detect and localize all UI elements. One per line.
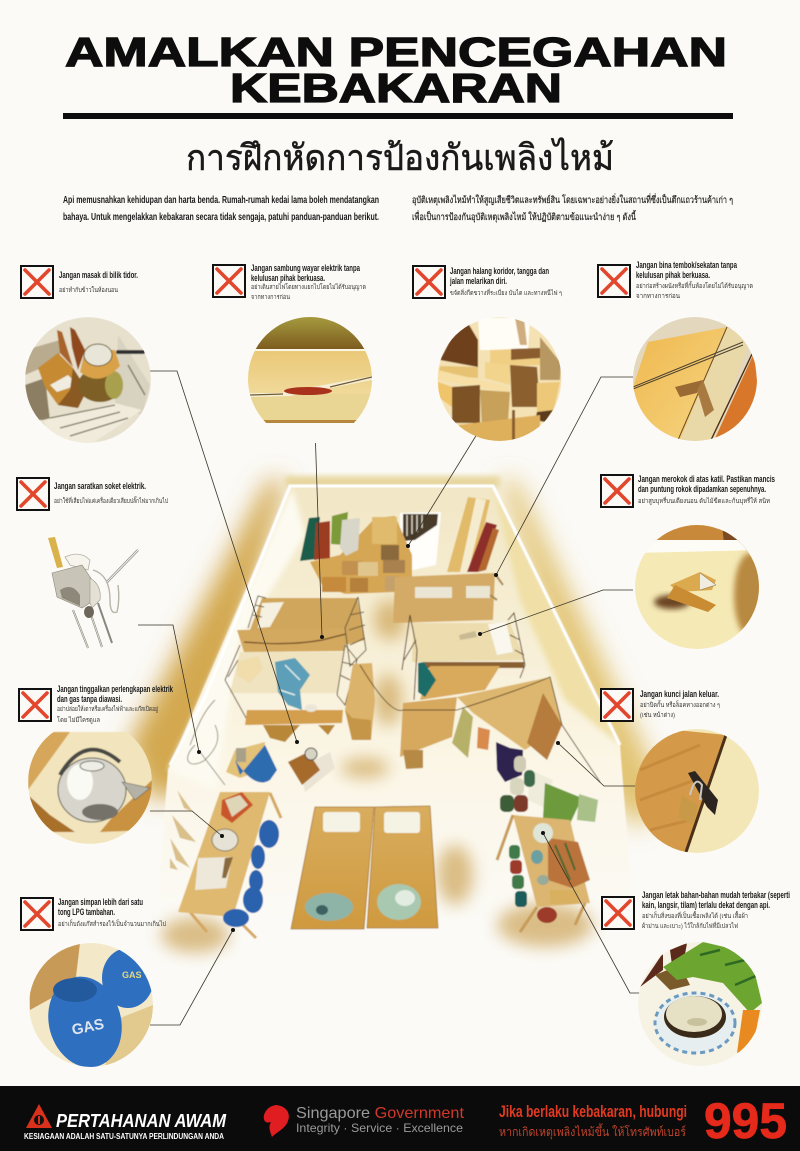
warning: gas cylinder: Jangan simpan lebih dari satu [58, 897, 143, 907]
circle: gas cylinders: GAS [70, 1016, 106, 1039]
boards against wall [447, 497, 499, 572]
circle: matchbox on bed [635, 525, 766, 650]
intro text: malay: bahaya. Untuk mengelakkan kebakaran secara tidak sengaja, patuhi panduan-panduan berikut. [63, 212, 379, 223]
x box: gas cylinder [21, 898, 53, 930]
warning: socket: อย่าใช้ที่เสียบไฟแค่เครื่องเดียวเสียบปลั๊กไฟมากเกินไป [54, 496, 168, 505]
title: KEBAKARAN [230, 65, 562, 111]
warning: smoking [638, 474, 775, 505]
warning: cooking: อย่าทำกับข้าวในห้องนอน [59, 286, 118, 294]
warning: locked exit [640, 689, 720, 719]
gas cylinders [223, 820, 279, 927]
warning: gas cylinder [58, 897, 166, 928]
circle: cloth near stove [638, 942, 762, 1066]
dried leaves [170, 790, 196, 870]
warning: socket [54, 481, 168, 505]
laundry [477, 727, 598, 828]
civil defence logo [24, 1104, 227, 1141]
warning: corridor: jalan melarikan diri. [449, 276, 507, 286]
room glow left [128, 480, 285, 800]
right bed [402, 613, 525, 700]
left small table and blue bag [226, 742, 277, 782]
footer band [0, 1086, 800, 1151]
circle: blocked corridor boxes [438, 317, 562, 445]
lower right partitions [360, 665, 600, 782]
warning: partition: Jangan bina tembok/sekatan tanpa [636, 260, 738, 270]
electric cords on floor [188, 700, 225, 785]
paint cans [500, 756, 557, 923]
warning: wiring: Jangan sambung wayar elektrik tanpa [251, 263, 361, 273]
wall edges [170, 486, 620, 765]
room glow top [285, 476, 500, 488]
x box: socket [17, 478, 49, 510]
warning: cooking [59, 270, 138, 294]
mattresses [291, 806, 438, 929]
warning: corridor: ขจัดสิ่งกีดขวางที่ระเบียง บันได และทางหนีไฟ ๆ [450, 288, 562, 297]
warning: appliances: Jangan tinggalkan perlengkapan elektrik [57, 684, 174, 694]
illustration: room [128, 476, 665, 1000]
warning: corridor: Jangan halang koridor, tangga dan [450, 266, 549, 276]
warning: socket: Jangan saratkan soket elektrik. [54, 481, 146, 491]
x box: partition [598, 265, 630, 297]
emergency call text: หากเกิดเหตุเพลิงไหม้ขึ้น ให้โทรศัพท์เบอร์ [499, 1123, 686, 1140]
warning: wiring: อย่าเดินสายไฟโดยทางแยกไปโดยไม่ได้รับอนุญาต [251, 283, 366, 291]
warning: appliances: dan gas tanpa diawasi. [57, 694, 122, 704]
title: AMALKAN PENCEGAHAN [65, 29, 727, 75]
illustration: overloaded socket [48, 537, 138, 648]
emergency number: 995 [704, 1093, 787, 1149]
warning: partition: อย่าก่อสร้างผนังหรือที่กั้นห้องโดยไม่ได้รับอนุญาต [636, 281, 753, 290]
stacked boxes [310, 516, 412, 594]
x box: appliances [19, 689, 51, 721]
room floor [150, 487, 640, 1000]
warning: partition [636, 260, 753, 300]
circle: damaged wire [248, 317, 372, 443]
circle: gas cylinders: GAS [122, 970, 142, 980]
civil defence logo: PERTAHANAN AWAM [56, 1111, 227, 1131]
warning: wiring: จากทางการก่อน [251, 294, 290, 301]
circle: kettle [28, 732, 152, 844]
warning: wiring: kelulusan pihak berkuasa. [251, 273, 325, 283]
thai title: การฝึกหัดการป้องกันเพลิงไหม้ [186, 137, 614, 178]
warning: partition: kelulusan pihak berkuasa. [636, 270, 710, 280]
warning: appliances: โดย ไม่มีใครดูแล [57, 716, 100, 724]
doorway and stairs [400, 512, 441, 570]
warning: locked exit: Jangan kunci jalan keluar. [640, 689, 719, 699]
emergency call text: Jika berlaku kebakaran, hubungi [499, 1102, 687, 1121]
x box: locked exit [601, 689, 633, 721]
partition with drawings [393, 573, 503, 623]
warning: locked exit: (เช่น หน้าต่าง) [640, 711, 675, 719]
x box: flammables [602, 897, 634, 929]
civil defence logo: KESIAGAAN ADALAH SATU-SATUNYA PERLINDUNGAN ANDA [24, 1132, 224, 1141]
title [63, 29, 733, 119]
warning: locked exit: อย่าปิดกั้น หรือล็อคทางออกต่าง ๆ [640, 700, 720, 709]
upper bunk bed [237, 596, 366, 666]
singapore government logo [264, 1105, 465, 1137]
warning: appliances: อย่าปล่อยให้เตาหรือเครื่องไฟฟ้าและแก๊สเปิดอยู่ [57, 704, 158, 713]
warning: gas cylinder: tong LPG tambahan. [58, 907, 115, 917]
food on newspaper [288, 748, 335, 792]
intro text: malay [63, 195, 379, 223]
warning: smoking: อย่าสูบบุหรี่บนเตียงนอน ดับไม้ขีดและก้นบุหรี่ให้ สนิท [638, 496, 770, 505]
warning: flammables: ผ้าม่าน และเบาะ) ไว้ใกล้กับไฟที่มีเปลวไฟ [642, 921, 738, 930]
intro text: thai: เพื่อเป็นการป้องกันอุบัติเหตุเพลิงไหม้ ให้ปฏิบัติตามข้อแนะนำง่าย ๆ ดังนี้ [412, 210, 637, 223]
warning: wiring [251, 263, 366, 301]
warning: flammables [642, 890, 790, 930]
x box: wiring [213, 265, 245, 297]
floor shadows [161, 600, 593, 953]
intro text: thai [412, 193, 733, 223]
circle: partition wall [633, 317, 760, 445]
lower bunk bed [225, 645, 357, 742]
warning: appliances [57, 684, 174, 724]
emergency call text [499, 1102, 687, 1140]
x box: corridor [413, 266, 445, 298]
boxes by bed [345, 663, 375, 740]
leader lines [138, 371, 640, 1025]
room glow right [500, 480, 665, 830]
warning: gas cylinder: อย่าเก็บถังแก๊สสำรองไว้เป็นจำนวนมากเกินไป [58, 919, 166, 928]
table with food and cloth [497, 815, 590, 932]
circle: cooking on newspaper [25, 317, 151, 445]
x box: smoking [601, 475, 633, 507]
circle: gas cylinders [29, 943, 154, 1076]
intro text: malay: Api memusnahkan kehidupan dan harta benda. Rumah-rumah kedai lama boleh mendatangkan [63, 195, 379, 206]
singapore government logo: Integrity · Service · Excellence [296, 1121, 463, 1135]
singapore government logo: Singapore Government [296, 1105, 465, 1122]
left table with kettle and newspaper [178, 792, 281, 938]
warning: corridor [449, 266, 562, 297]
x box: cooking [21, 266, 53, 298]
warning: partition: จากทางการก่อน [636, 293, 681, 300]
warning: flammables: อย่าเก็บสิ่งของที่เป็นเชื้อเพลิงได้ (เช่น เสื้อผ้า [642, 911, 748, 920]
suitcases [300, 512, 360, 561]
circle: padlock on door [635, 729, 759, 853]
warning: cooking: Jangan masak di bilik tidor. [59, 270, 138, 280]
